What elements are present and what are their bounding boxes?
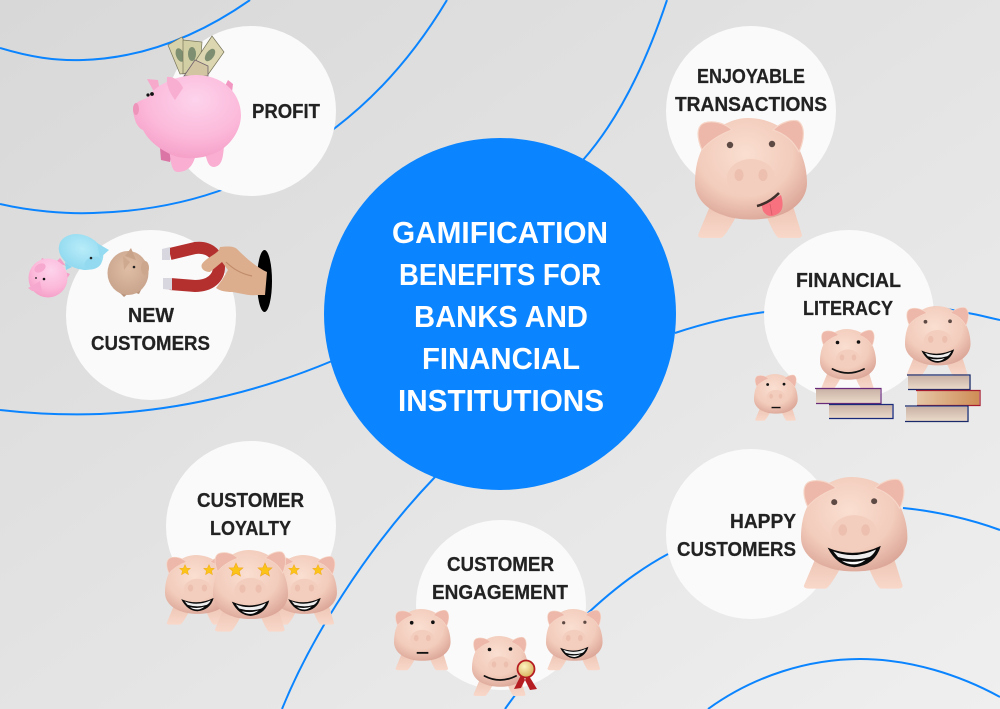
icon: pink pig bbox=[28, 258, 70, 298]
label: happy customers bbox=[677, 511, 797, 561]
label: financial literacy: FINANCIAL bbox=[796, 270, 901, 292]
label: new customers: NEW bbox=[128, 305, 174, 327]
label: enjoyable transactions: ENJOYABLE bbox=[697, 66, 805, 88]
label: happy customers: CUSTOMERS bbox=[677, 539, 796, 561]
panel: happy customers bbox=[666, 449, 907, 619]
icon: pink piggy bank with money bbox=[133, 36, 241, 172]
icon: small pig, neutral bbox=[754, 374, 798, 421]
icon: big grinning pig bbox=[801, 477, 907, 589]
title: BANKS AND bbox=[414, 299, 588, 334]
label: customer engagement: CUSTOMER bbox=[447, 554, 555, 576]
icon: happy pig with medal bbox=[472, 636, 537, 696]
icon: three star-eyed pigs bbox=[165, 550, 337, 632]
panel: enjoyable transactions bbox=[666, 26, 836, 238]
label: enjoyable transactions bbox=[675, 66, 827, 116]
label: customer loyalty bbox=[197, 490, 305, 540]
central circle bbox=[324, 138, 676, 490]
panel: new customers bbox=[28, 228, 272, 400]
title: GAMIFICATION bbox=[392, 215, 608, 250]
label: new customers: CUSTOMERS bbox=[91, 333, 210, 355]
label: financial literacy bbox=[796, 270, 901, 320]
title: INSTITUTIONS bbox=[398, 383, 604, 418]
title: BENEFITS FOR bbox=[399, 257, 601, 292]
label: customer engagement: ENGAGEMENT bbox=[432, 582, 568, 604]
icon: big pig on books bbox=[905, 306, 980, 422]
label: profit: PROFIT bbox=[252, 101, 320, 123]
icon: grinning pig bbox=[546, 609, 603, 670]
icon: medium pig on books bbox=[815, 329, 893, 418]
panel: profit bbox=[133, 26, 336, 196]
label: financial literacy: LITERACY bbox=[803, 298, 894, 320]
label: customer engagement bbox=[432, 554, 568, 604]
icon: pig with tongue out bbox=[695, 118, 807, 238]
icon: neutral pig bbox=[394, 609, 451, 670]
panel: customer engagement bbox=[394, 520, 603, 696]
title: FINANCIAL bbox=[422, 341, 580, 376]
label: customer loyalty: CUSTOMER bbox=[197, 490, 305, 512]
icon: hand with magnet bbox=[162, 246, 267, 295]
label: happy customers: HAPPY bbox=[730, 511, 797, 533]
title bbox=[392, 215, 608, 418]
label: enjoyable transactions: TRANSACTIONS bbox=[675, 94, 827, 116]
icon: tan pig bbox=[108, 248, 149, 297]
panel: customer loyalty bbox=[165, 441, 337, 632]
icon: blue pig bbox=[53, 228, 109, 276]
icon: black hole bbox=[257, 250, 272, 312]
label: customer loyalty: LOYALTY bbox=[210, 518, 292, 540]
label: new customers bbox=[91, 305, 210, 355]
panel: financial literacy bbox=[754, 230, 980, 422]
